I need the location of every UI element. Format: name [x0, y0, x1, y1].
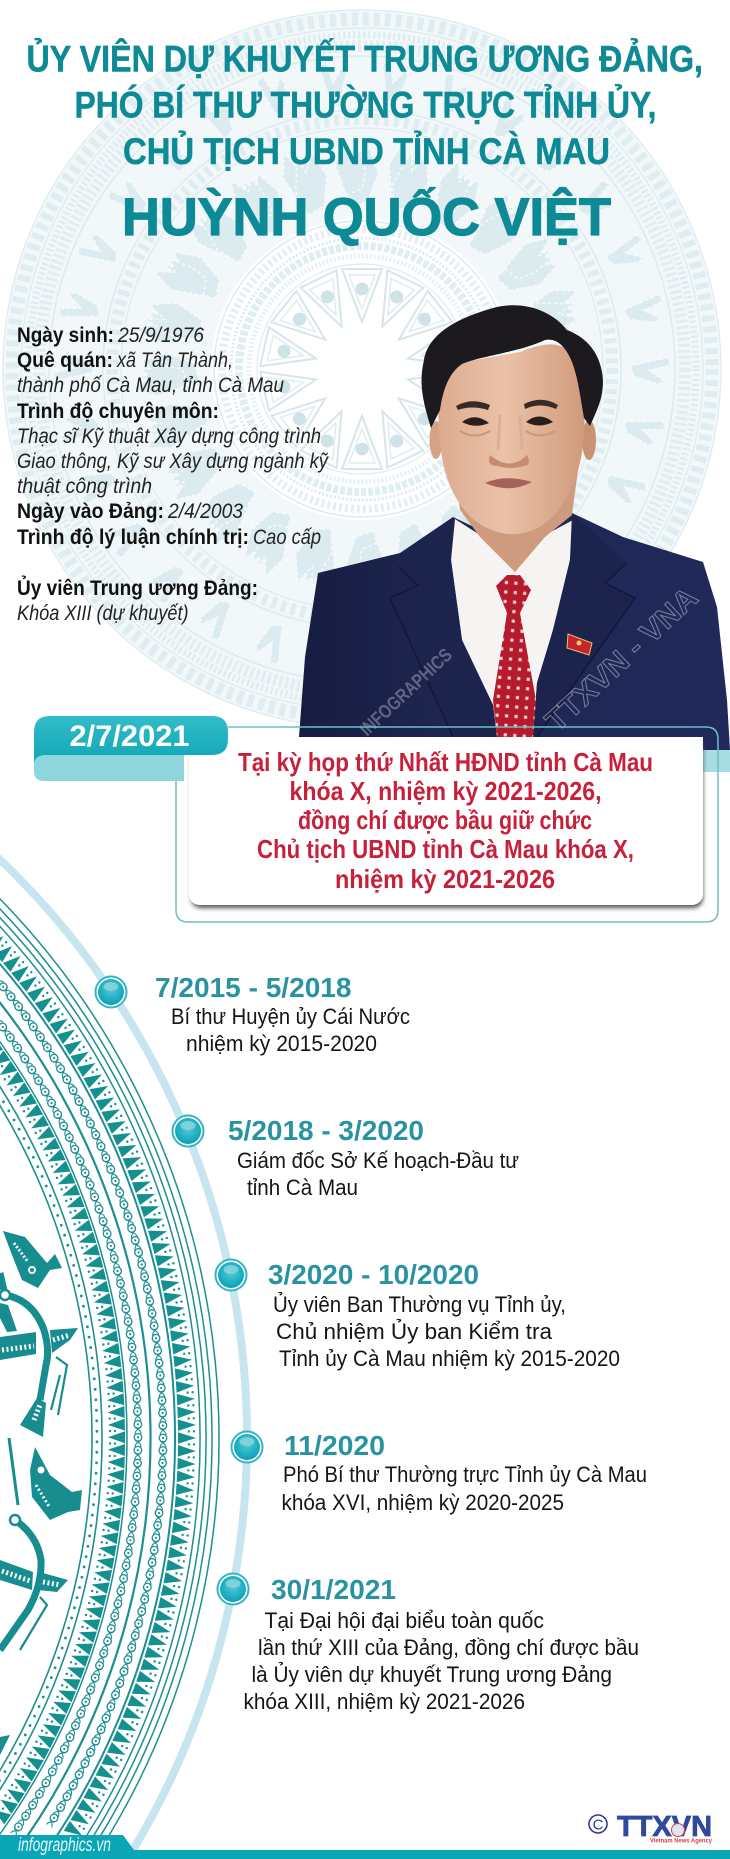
- background: pale bronze drum: [3, 10, 721, 728]
- biography text block: Thạc sĩ Kỹ thuật Xây dựng công trình: [17, 425, 321, 448]
- timeline item: 30/1/2021: khóa XIII, nhiệm kỳ 2021-2026: [244, 1689, 525, 1714]
- biography text block: Khóa XIII (dự khuyết): [17, 602, 188, 625]
- timeline item: 7/2015 - 5/2018: Bí thư Huyện ủy Cái Nước: [171, 1004, 410, 1029]
- necktie: [493, 575, 536, 737]
- title: HUỲNH QUỐC VIỆT: [122, 186, 611, 247]
- outline box: [176, 727, 718, 922]
- hair: [422, 305, 603, 428]
- timeline item: 30/1/2021: [218, 1574, 639, 1714]
- timeline item: 5/2018 - 3/2020: 5/2018 - 3/2020: [228, 1115, 424, 1146]
- icon: bird: [30, 1447, 82, 1520]
- timeline item: 3/2020 - 10/2020: [216, 1259, 620, 1371]
- card text: khóa X, nhiệm kỳ 2021-2026,: [290, 776, 602, 806]
- logo: TTXVN: C: [593, 1816, 604, 1834]
- date tab fold: [34, 755, 184, 781]
- icon: fish: [3, 1231, 62, 1288]
- timeline item: 11/2020: Phó Bí thư Thường trực Tỉnh ủy Cà Mau: [283, 1462, 647, 1487]
- card text: Tại kỳ họp thứ Nhất HĐND tỉnh Cà Mau: [238, 747, 653, 777]
- biography text block: Ngày vào Đảng:: [17, 500, 164, 523]
- timeline item: 5/2018 - 3/2020: tỉnh Cà Mau: [247, 1175, 358, 1200]
- card text: [238, 747, 653, 894]
- eyebrows: [456, 400, 558, 410]
- suit jacket: [299, 513, 730, 750]
- logo: TTXVN: Vietnam News Agency: [650, 1838, 712, 1844]
- lapels: [390, 513, 635, 737]
- biography text block: 2/4/2003: [167, 500, 243, 523]
- timeline item: 30/1/2021: 30/1/2021: [271, 1574, 396, 1605]
- footer bar: infographics.vn: [18, 1835, 111, 1856]
- neck and face: [455, 470, 578, 572]
- biography text block: Quê quán:: [17, 349, 113, 372]
- logo: TTXVN: TTXVN: [617, 1811, 712, 1843]
- portrait photo: [299, 305, 730, 750]
- white card: [188, 737, 703, 905]
- timeline item: 7/2015 - 5/2018: [96, 972, 410, 1056]
- biography text block: Ủy viên Trung ương Đảng:: [17, 576, 258, 600]
- biography text block: 25/9/1976: [117, 324, 204, 347]
- timeline item: 3/2020 - 10/2020: 3/2020 - 10/2020: [268, 1259, 479, 1290]
- timeline item: 30/1/2021: Tại Đại hội đại biểu toàn quốc: [264, 1608, 544, 1633]
- nose: [489, 455, 529, 468]
- timeline item: 11/2020: [232, 1430, 647, 1515]
- timeline item: 11/2020: khóa XVI, nhiệm kỳ 2020-2025: [282, 1490, 564, 1515]
- date tab: [34, 716, 228, 765]
- timeline item: 30/1/2021: là Ủy viên dự khuyết Trung ương Đảng: [252, 1662, 612, 1687]
- biography text block: [17, 324, 329, 625]
- footer bar: [0, 1835, 730, 1859]
- biography text block: xã Tân Thành,: [116, 349, 233, 372]
- biography text block: thuật công trình: [17, 475, 152, 498]
- timeline item: 3/2020 - 10/2020: Ủy viên Ban Thường vụ Tỉnh ủy,: [273, 1292, 566, 1317]
- title: CHỦ TỊCH UBND TỈNH CÀ MAU: [123, 130, 610, 172]
- biography text block: Giao thông, Kỹ sư Xây dựng ngành kỹ: [17, 450, 329, 473]
- card text: Chủ tịch UBND tỉnh Cà Mau khóa X,: [257, 834, 634, 864]
- timeline item: 11/2020: 11/2020: [284, 1430, 385, 1461]
- highlight panel: 2/7/2021: [34, 716, 730, 922]
- party pin: [567, 634, 592, 655]
- lower-left bronze drum decoration: [0, 858, 501, 1857]
- timeline item: 7/2015 - 5/2018: 7/2015 - 5/2018: [155, 972, 352, 1003]
- biography text block: Trình độ lý luận chính trị:: [17, 526, 249, 549]
- timeline item: 5/2018 - 3/2020: [172, 1115, 519, 1200]
- watermark: TTXVN VNA: TTXVN - VNA: [539, 581, 704, 738]
- biography text block: Cao cấp: [253, 526, 321, 549]
- title: [26, 38, 703, 247]
- eyes: [462, 416, 553, 426]
- biography text block: Ngày sinh:: [17, 324, 114, 347]
- card text: nhiệm kỳ 2021-2026: [335, 864, 555, 894]
- timeline item: 3/2020 - 10/2020: Tỉnh ủy Cà Mau nhiệm kỳ 2015-2020: [279, 1346, 620, 1371]
- icon: crane one: [0, 1273, 78, 1437]
- ribbon right: [703, 750, 730, 772]
- date text: 2/7/2021: [70, 720, 190, 753]
- timeline item: 30/1/2021: lần thứ XIII của Đảng, đồng chí được bầu: [258, 1635, 639, 1660]
- biography text block: thành phố Cà Mau, tỉnh Cà Mau: [17, 374, 284, 397]
- card text: đồng chí được bầu giữ chức: [298, 805, 592, 835]
- shirt: [451, 519, 573, 737]
- mouth: [485, 478, 532, 488]
- timeline item: 7/2015 - 5/2018: nhiệm kỳ 2015-2020: [186, 1031, 377, 1056]
- timeline item: 3/2020 - 10/2020: Chủ nhiệm Ủy ban Kiểm tra: [276, 1319, 553, 1344]
- icon: crane two: [0, 1438, 68, 1755]
- light blue timeline arc: [0, 858, 247, 1857]
- biography text block: Trình độ chuyên môn:: [17, 400, 219, 423]
- timeline item: 5/2018 - 3/2020: Giám đốc Sở Kế hoạch-Đầu tư: [237, 1148, 519, 1173]
- watermark: infographics: INFOGRAPHICS: [356, 645, 457, 741]
